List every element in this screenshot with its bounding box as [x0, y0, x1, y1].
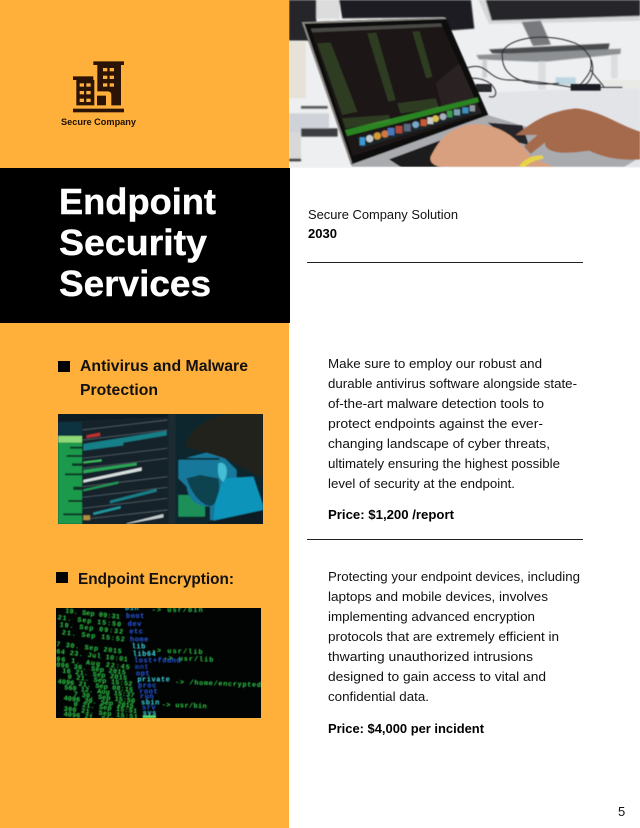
heading text — [80, 358, 248, 399]
text: encryption description: protocols that are extremely efficient in — [328, 629, 559, 644]
photo: man reading code on a monitor — [58, 414, 263, 524]
photo: green terminal directory listing: -> usr/bin — [162, 702, 207, 711]
photo: green terminal directory listing: mnt — [135, 664, 149, 672]
photo: green terminal directory listing — [56, 608, 261, 718]
photo: green terminal directory listing: 7 30. Sep 15:50 — [73, 691, 135, 706]
photo: green terminal directory listing: home — [130, 636, 149, 644]
photo: green terminal directory listing: -> /home/encrypted — [175, 679, 261, 690]
photo: green terminal directory listing: -> usr/lib — [152, 647, 203, 657]
photo: green terminal directory listing: 96 1. Aug 22:45 — [56, 656, 130, 672]
heading text: Endpoint Encryption: — [78, 571, 234, 588]
panel: title block — [0, 168, 290, 323]
text: antivirus description: level of security at the endpoint. — [328, 476, 515, 491]
heading text: Protection — [80, 382, 158, 399]
laptop base — [351, 115, 636, 168]
heading text: Antivirus and Malware — [80, 358, 248, 375]
photo: green terminal directory listing: -> usr/lib — [163, 655, 213, 665]
text: encryption description: thwarting unauthorized intrusions — [328, 649, 534, 664]
photo: green terminal directory listing: root — [139, 688, 158, 696]
photo: green terminal directory listing: 096 30. Sep 2015 — [56, 662, 126, 678]
price: antivirus: Price: $1,200 /report — [328, 507, 455, 522]
photo: green terminal directory listing: boot — [126, 613, 145, 621]
text: encryption description: laptops and mobile devices, involves — [328, 589, 549, 604]
panel: logo block — [0, 0, 289, 168]
photo: green terminal directory listing: srv — [142, 705, 156, 713]
photo: green terminal directory listing: 16 21. Sep 2015 — [62, 668, 127, 683]
text: encryption description: implementing advanced encryption — [328, 609, 535, 624]
heading: endpoint encryption — [56, 571, 234, 588]
title: Endpoint — [59, 181, 216, 222]
panel: lower orange column — [0, 323, 289, 828]
photo: green terminal directory listing: -> usr/bin — [152, 607, 203, 615]
bullet square — [56, 572, 68, 583]
logo: Secure Company — [61, 61, 136, 127]
photo: green terminal directory listing: 21. Sep 15:52 — [61, 629, 125, 644]
photo: green terminal directory listing: 4096 30. Sep 2015 — [63, 695, 134, 711]
photo: green terminal directory listing: lost+found — [134, 658, 181, 666]
photo: green terminal directory listing: 0 21. Sep 15:52 — [67, 674, 133, 689]
text: encryption description: designed to gain access to vital and — [328, 669, 546, 684]
title: Security — [59, 222, 207, 263]
photo: laptop on a desk — [289, 0, 640, 168]
head — [178, 450, 237, 520]
photo: green terminal directory listing: sys — [143, 710, 157, 718]
photo: green terminal directory listing: 4096 21. Sep 08:15 — [57, 678, 133, 695]
photo: green terminal directory listing: sbin — [141, 699, 160, 707]
photo: green terminal directory listing: run — [140, 694, 154, 702]
photo: green terminal directory listing: etc — [129, 629, 144, 637]
text: antivirus description: durable antivirus software alongside state- — [328, 376, 577, 391]
photo: green terminal directory listing: 4096 21. Sep 15:49 — [63, 711, 139, 728]
photo: green terminal directory listing: 0 21. Sep 15:51 — [73, 701, 137, 716]
text: encryption description: confidential data. — [328, 689, 429, 704]
subtitle: solution and year: 2030 — [308, 226, 337, 241]
logo wordmark: Secure Company — [61, 117, 136, 127]
heading: antivirus and malware protection — [58, 358, 248, 399]
photo: green terminal directory listing: 19. Sep 09:31 — [65, 608, 120, 622]
text: antivirus description: protect endpoints against the ever- — [328, 416, 543, 431]
photo: green terminal directory listing: private — [137, 677, 170, 685]
photo: green terminal directory listing: proc — [138, 683, 157, 691]
photo: green terminal directory listing: 64 23. Jul 10:01 — [56, 648, 128, 664]
text: antivirus description: of-the-art malware detection tools to — [328, 396, 544, 411]
photo: green terminal directory listing: 21. Sep 15:50 — [57, 614, 121, 630]
photo: green terminal directory listing: bin — [125, 605, 139, 613]
photo: green terminal directory listing: opt — [136, 670, 150, 678]
photo: green terminal directory listing: 560 12. Aug 15:37 — [64, 684, 135, 700]
text: antivirus description: ultimately ensuring the highest possible — [328, 456, 560, 471]
subtitle: solution and year — [308, 207, 458, 241]
photo: green terminal directory listing: dev — [128, 621, 142, 629]
subtitle: solution and year: Secure Company Solution — [308, 207, 458, 222]
price: encryption: Price: $4,000 per incident — [328, 721, 485, 736]
text: antivirus description: Make sure to employ our robust and — [328, 356, 542, 371]
text: antivirus description: changing landscape of cyber threats, — [328, 436, 550, 451]
title — [59, 181, 216, 304]
photo: green terminal directory listing: lib64 — [133, 651, 156, 659]
page number: 5 — [618, 804, 625, 819]
hands — [430, 124, 556, 168]
text: antivirus description — [328, 356, 577, 491]
icon: office buildings — [73, 61, 124, 112]
title: Services — [59, 263, 211, 304]
photo: green terminal directory listing: lib — [132, 644, 146, 652]
photo: green terminal directory listing: 300 21. Sep 15:51 — [63, 706, 138, 722]
text: encryption description — [328, 569, 580, 704]
text: encryption description: Protecting your endpoint devices, including — [328, 569, 580, 584]
photo: green terminal directory listing: 7 30. Sep 2015 — [56, 641, 122, 656]
lid — [302, 17, 488, 165]
photo: green terminal directory listing: 19. Sep 09:32 — [59, 622, 123, 637]
bullet square — [58, 361, 70, 372]
